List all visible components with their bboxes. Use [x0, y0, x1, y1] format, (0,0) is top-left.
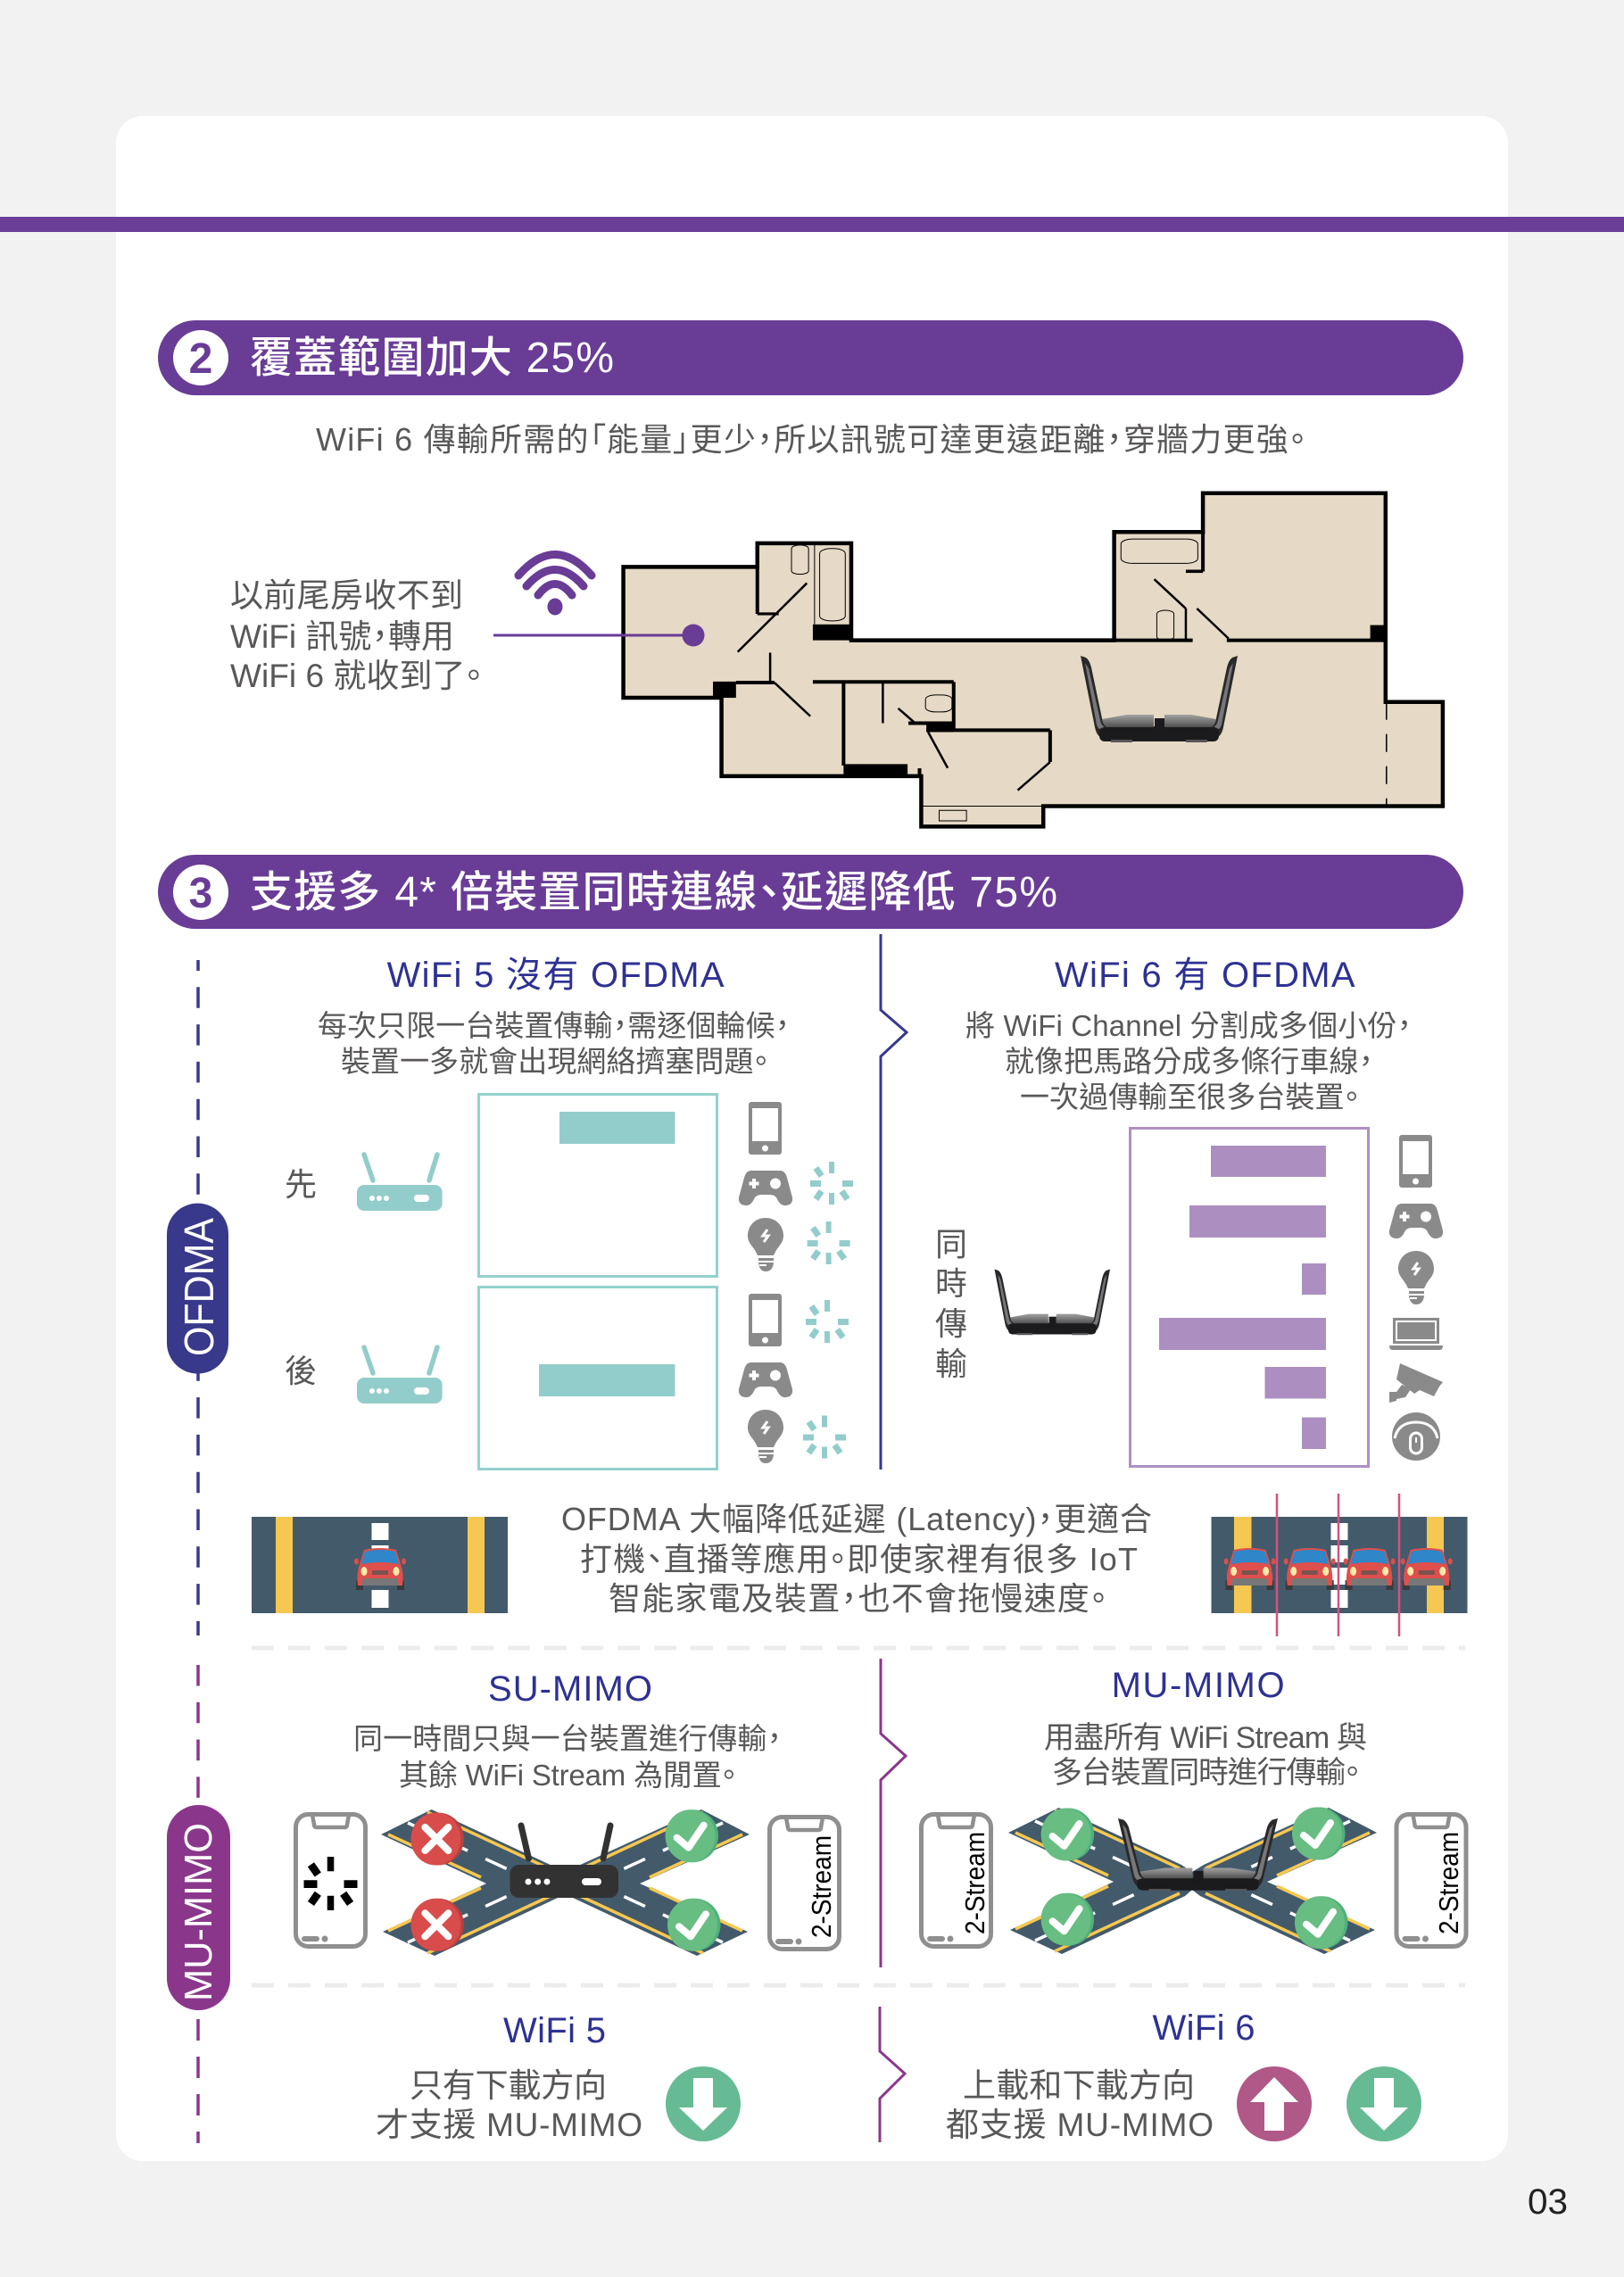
heading: MU-MIMO: [1112, 1666, 1285, 1705]
devices: later group: [739, 1294, 849, 1463]
description: 裝置一多就會出現網絡擠塞問題。: [341, 1045, 768, 1078]
router: [994, 1269, 1110, 1335]
panel: WiFi 5 direction: [376, 2011, 741, 2143]
description: 每次只限一台裝置傳輸，需逐個輪候，: [318, 1009, 790, 1042]
phone: 2-stream: 2-Stream: [806, 1835, 837, 1938]
chart: first transmission: [478, 1094, 717, 1276]
divider arrow: WiFi 5 to WiFi 6: [880, 2007, 905, 2142]
icon: download arrow: [1346, 2066, 1421, 2141]
text block: OFDMA latency: OFDMA 大幅降低延遲 (Latency)，更適合: [561, 1501, 1152, 1537]
description: [946, 2067, 1214, 2143]
label pill: MU-MIMO: [167, 1805, 230, 2010]
panel: MU-MIMO: [921, 1666, 1466, 1954]
panel: WiFi 5 without OFDMA: [285, 956, 853, 1469]
description: 其餘 WiFi Stream 為閒置。: [399, 1759, 736, 1792]
icon: upload arrow: [1237, 2066, 1312, 2141]
crossroad: [1008, 1808, 1377, 1954]
description: [1044, 1721, 1367, 1790]
white card: [116, 116, 1508, 2161]
description: 上載和下載方向: [963, 2067, 1195, 2104]
divider arrow: SU to MU: [881, 1659, 906, 1967]
icon: teal router later: [357, 1347, 443, 1403]
heading: WiFi 5 沒有 OFDMA: [387, 956, 725, 995]
icon: download arrow: [666, 2066, 741, 2141]
devices: first group: [739, 1102, 853, 1271]
crossroad: [381, 1809, 750, 1956]
description: [376, 2067, 642, 2143]
description: 多台裝置同時進行傳輸。: [1052, 1756, 1360, 1790]
label: simultaneous transmission: 同: [935, 1226, 967, 1263]
dashed divider 2: [252, 1983, 1465, 1988]
text block: OFDMA latency: 智能家電及裝置，也不會拖慢速度。: [609, 1580, 1106, 1617]
subtitle: section 2: WiFi 6 傳輸所需的「能量」更少，所以訊號可達更遠距離，穿牆力更強。: [316, 421, 1305, 458]
router on floor plan: [1081, 656, 1238, 742]
icon: wifi signal: [518, 555, 592, 616]
description: 同一時間只與一台裝置進行傳輸，: [353, 1722, 782, 1755]
icon: security camera: [1389, 1363, 1443, 1403]
label pill: OFDMA: [167, 1204, 228, 1374]
dashed timeline: MU-MIMO: [196, 1659, 200, 2143]
label: simultaneous transmission: [935, 1226, 967, 1382]
icon: router: [510, 1826, 618, 1898]
panel: WiFi 6 direction: [946, 2008, 1421, 2143]
phone: right 2-stream: 2-Stream: [1433, 1832, 1464, 1934]
text block: back room note: WiFi 6 就收到了。: [230, 658, 482, 694]
text block: back room note: [230, 577, 482, 694]
label: later: 後: [285, 1353, 317, 1389]
devices: six devices: [1389, 1135, 1443, 1461]
label: simultaneous transmission: 輸: [935, 1346, 967, 1382]
description: 才支援 MU-MIMO: [376, 2107, 642, 2143]
label pill: OFDMA: OFDMA: [176, 1218, 222, 1356]
top purple band: [0, 217, 1624, 232]
heading: WiFi 6 有 OFDMA: [1055, 956, 1355, 995]
heading: section 3: 3: [189, 870, 212, 917]
description: 就像把馬路分成多條行車線，: [1005, 1045, 1373, 1078]
heading: section 2: 2: [189, 335, 212, 383]
heading: section 3: 支援多 4* 倍裝置同時連線、延遲降低 75%: [250, 869, 1057, 916]
heading: section 2: 覆蓋範圍加大 25%: [250, 335, 614, 382]
description: 一次過傳輸至很多台裝置。: [1020, 1081, 1359, 1114]
heading: SU-MIMO: [488, 1669, 652, 1709]
heading: section 3: [158, 855, 1463, 929]
description: 只有下載方向: [410, 2067, 607, 2104]
label: simultaneous transmission: 傳: [935, 1305, 967, 1342]
dashed divider 1: [252, 1645, 1465, 1651]
label: simultaneous transmission: 時: [935, 1265, 967, 1302]
divider arrow: OFDMA: [881, 934, 907, 1470]
road: multiple cars in lanes: [1212, 1494, 1467, 1636]
icon: car: [354, 1548, 406, 1590]
text block: OFDMA latency: 打機、直播等應用。即使家裡有很多 IoT: [580, 1541, 1138, 1577]
label: first: 先: [285, 1166, 317, 1203]
description: [965, 1009, 1412, 1114]
road: single car: [252, 1517, 508, 1613]
icon: teal router first: [357, 1155, 443, 1211]
panel: WiFi 6 with OFDMA: [935, 956, 1443, 1467]
text block: back room note: 以前尾房收不到: [230, 577, 463, 614]
panel: SU-MIMO: [296, 1669, 839, 1956]
bar chart: parallel transmission: [1130, 1128, 1369, 1467]
phone: waiting: [296, 1815, 366, 1947]
phone: right 2-stream: [1396, 1815, 1466, 1947]
phone: 2-stream: [769, 1817, 839, 1949]
status icons: [410, 1809, 721, 1951]
pointer line to back room: [493, 625, 705, 646]
status icons: [1041, 1808, 1347, 1949]
text block: OFDMA latency: [561, 1501, 1152, 1617]
label pill: MU-MIMO: MU-MIMO: [177, 1823, 220, 2001]
icon: robot vacuum: [1392, 1412, 1440, 1461]
heading: section 2: [158, 320, 1463, 395]
router: [1118, 1818, 1278, 1891]
heading: WiFi 6: [1153, 2008, 1255, 2048]
phone: left 2-stream: 2-Stream: [959, 1832, 990, 1934]
description: 用盡所有 WiFi Stream 與: [1044, 1721, 1367, 1755]
floor plan: [624, 493, 1443, 826]
chart: later transmission: [478, 1287, 717, 1469]
heading: WiFi 5: [503, 2011, 606, 2050]
phone: left 2-stream: [921, 1815, 990, 1947]
page number: 03: [1528, 2182, 1568, 2222]
text block: back room note: WiFi 訊號，轉用: [230, 618, 454, 655]
dashed timeline: OFDMA: [196, 960, 200, 1635]
description: 都支援 MU-MIMO: [946, 2107, 1214, 2143]
description: [353, 1722, 782, 1792]
description: 將 WiFi Channel 分割成多個小份，: [965, 1009, 1412, 1042]
description: [318, 1009, 790, 1078]
